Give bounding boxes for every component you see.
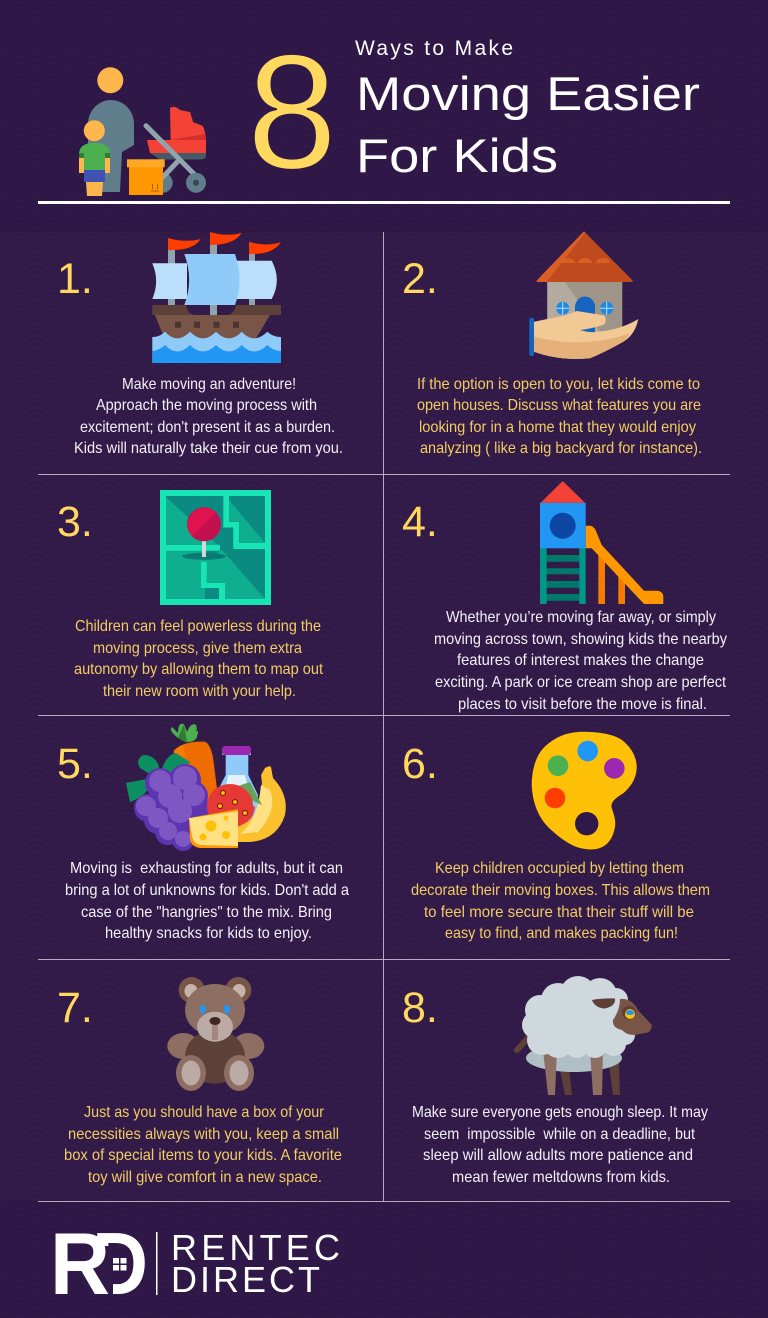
panel: step 4	[402, 481, 727, 713]
panel: step 2	[402, 233, 702, 457]
step 2 text: open houses. Discuss what features you are	[417, 397, 701, 414]
logo: Rentec Direct: D	[92, 1214, 148, 1313]
step 1 text: Approach the moving process with	[96, 397, 317, 414]
icon: paint palette	[532, 732, 637, 849]
icon: teddy bear	[167, 977, 264, 1091]
step 5 text: Moving is exhausting for adults, but it can	[70, 860, 343, 877]
step 4 text: features of interest makes the change	[457, 652, 704, 669]
number 6: 6.	[402, 740, 438, 788]
step 3 text: Children can feel powerless during the	[75, 618, 321, 635]
icon: sheep	[517, 976, 652, 1095]
icon: ship	[152, 232, 281, 363]
step 8 text: mean fewer meltdowns from kids.	[452, 1169, 670, 1186]
step 5 text	[65, 860, 349, 942]
step 1 text: excitement; don't present it as a burden.	[80, 419, 335, 436]
step 8 text: Make sure everyone gets enough sleep. It may	[412, 1104, 708, 1121]
header illustration: family moving	[79, 67, 206, 196]
title: Moving Easier	[356, 67, 700, 120]
step 5 text: bring a lot of unknowns for kids. Don't add a	[65, 882, 349, 899]
step 7 text	[64, 1104, 342, 1186]
panel: step 1	[57, 232, 343, 457]
big number 8: 8	[247, 20, 337, 203]
step 4 text: moving across town, showing kids the nearby	[434, 631, 727, 648]
step 4 text: Whether you’re moving far away, or simply	[446, 609, 716, 626]
step 2 text: analyzing ( like a big backyard for instance).	[420, 440, 702, 457]
step 1 text	[74, 376, 343, 457]
step 2 text	[417, 376, 702, 457]
icon: healthy food	[126, 724, 286, 851]
logo: Rentec Direct: DIRECT	[171, 1259, 320, 1300]
step 7 text: toy will give comfort in a new space.	[88, 1169, 322, 1186]
icon: house in hand	[529, 233, 638, 359]
step 6 text: Keep children occupied by letting them	[435, 860, 684, 877]
step 5 text: case of the "hangries" to the mix. Bring	[81, 904, 332, 921]
title: For Kids	[356, 129, 558, 182]
step 6 text	[411, 860, 710, 942]
number 1: 1.	[57, 255, 93, 303]
step 4 text: exciting. A park or ice cream shop are perfect	[435, 674, 727, 691]
step 8 text: sleep will allow adults more patience and	[423, 1147, 693, 1164]
panel: step 3	[57, 490, 323, 700]
step 3 text: autonomy by allowing them to map out	[74, 661, 323, 678]
logo: Rentec Direct: RENTEC	[171, 1227, 340, 1268]
step 7 text: box of special items to your kids. A favorite	[64, 1147, 342, 1164]
step 6 text: easy to find, and makes packing fun!	[445, 925, 678, 942]
panel: step 8	[402, 976, 708, 1186]
step 8 text: seem impossible while on a deadline, but	[424, 1126, 695, 1143]
step 1 text: Make moving an adventure!	[122, 376, 296, 393]
icon: playground slide	[540, 481, 663, 604]
number 5: 5.	[57, 740, 93, 788]
number 2: 2.	[402, 255, 438, 303]
step 2 text: looking for in a home that they would enjoy	[419, 419, 696, 436]
step 7 text: Just as you should have a box of your	[84, 1104, 325, 1121]
logo: Rentec Direct	[50, 1214, 340, 1313]
panel: step 5	[57, 724, 349, 942]
title: Ways to Make	[355, 37, 513, 60]
step 1 text: Kids will naturally take their cue from you.	[74, 440, 343, 457]
step 8 text	[412, 1104, 708, 1186]
step 3 text: their new room with your help.	[103, 683, 296, 700]
panel: step 7	[57, 977, 342, 1186]
panel: step 6	[402, 732, 710, 942]
step 6 text: decorate their moving boxes. This allows them	[411, 882, 710, 899]
step 6 text: to feel more secure that their stuff will be	[424, 904, 694, 921]
number 3: 3.	[57, 498, 93, 546]
step 4 text	[434, 609, 727, 713]
step 5 text: healthy snacks for kids to enjoy.	[105, 925, 312, 942]
icon: floor plan map with pin	[160, 490, 271, 605]
number 4: 4.	[402, 498, 438, 546]
title	[355, 37, 700, 182]
step 7 text: necessities always with you, keep a small	[68, 1126, 339, 1143]
step 2 text: If the option is open to you, let kids come to	[417, 376, 700, 393]
step 3 text	[74, 618, 323, 700]
step 3 text: moving process, give them extra	[93, 640, 302, 657]
logo: Rentec Direct: R	[50, 1214, 110, 1313]
number 7: 7.	[57, 984, 93, 1032]
number 8: 8.	[402, 984, 438, 1032]
step 4 text: places to visit before the move is final.	[458, 696, 707, 713]
